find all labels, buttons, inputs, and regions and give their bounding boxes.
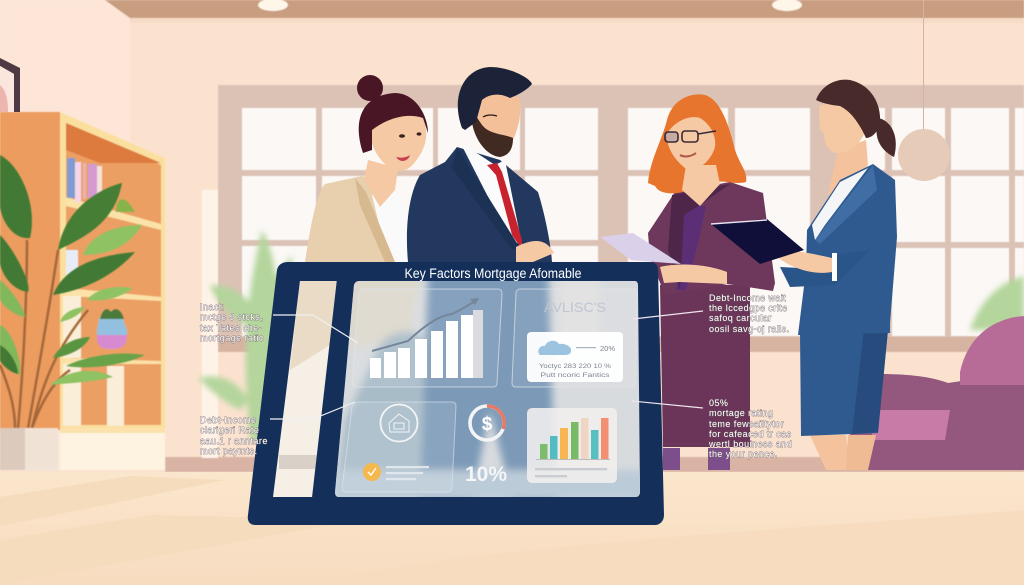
callout: bottom left <box>200 402 355 456</box>
callout: bottom left: clarigeri Rate <box>200 425 259 435</box>
callout: top right: Debt-Income wait <box>709 293 786 303</box>
callout: top left: Inact: <box>200 302 225 312</box>
bookshelf <box>0 112 165 470</box>
black tablet <box>711 219 804 264</box>
callout: bottom right: 05% <box>709 398 728 408</box>
person 2: man in navy suit <box>407 67 554 262</box>
callout: bottom right: teme fewsailtytor <box>709 419 784 429</box>
panel: analysis card: Putt ncoric Fantics <box>540 372 610 379</box>
callout: top left <box>200 302 358 343</box>
callout: bottom right: the your pence. <box>709 449 778 459</box>
icon: check <box>363 463 381 481</box>
callout: top right <box>633 293 790 334</box>
callout: bottom right: mortage rating <box>709 408 773 418</box>
background plant, sofa, lamp <box>198 0 1024 470</box>
callout: bottom right: wertl bouiness and <box>708 439 792 449</box>
percentage figure: 10% <box>465 463 507 486</box>
table top <box>0 472 1024 585</box>
callout: bottom left: mort paymts. <box>200 446 257 456</box>
window <box>218 85 1024 352</box>
icon: dollar gauge <box>470 406 504 440</box>
person 3: woman with orange hair <box>600 94 775 470</box>
callout: bottom left: Debt-Income <box>200 415 256 425</box>
callout: top right: safoq carcular <box>709 313 772 323</box>
panel: colour bar chart <box>527 408 617 483</box>
panel: analysis card: 20% <box>600 344 615 353</box>
callout: bottom left: aau.1 r anntare <box>200 436 268 446</box>
icon: house <box>380 404 418 442</box>
panel: analysis card: AVLISC'S <box>544 299 606 315</box>
panel: home and checklist <box>342 402 456 492</box>
callout: top right: oosil savg-oj ralls. <box>709 324 790 334</box>
icon: dollar gauge: $ <box>482 414 493 435</box>
person 1: woman in beige jacket <box>305 75 428 262</box>
wall picture frame <box>0 58 20 112</box>
panel: growth bar chart <box>352 289 502 387</box>
panel: analysis card <box>512 289 637 387</box>
back tablet <box>248 262 350 525</box>
front tablet <box>310 262 664 525</box>
callout: bottom right: for cafeaced tr cas <box>709 429 792 439</box>
view through screen <box>335 281 640 497</box>
person 4: woman in blue suit <box>769 80 897 470</box>
title: Key Factors Mortgage Afomable <box>404 266 582 281</box>
icon: cloud <box>538 341 571 355</box>
callout: top right: the lccedgpe crlte <box>709 303 788 313</box>
callout: top left: tax Tates che- <box>200 323 262 333</box>
panel: analysis card: Yoctyc 283 220 10 % <box>539 363 611 370</box>
foreground plant <box>0 155 145 470</box>
callout: top left: mctge J stcks, <box>200 312 263 322</box>
callout: bottom right <box>632 398 792 459</box>
callout: top left: mortgage ratio <box>200 333 264 343</box>
